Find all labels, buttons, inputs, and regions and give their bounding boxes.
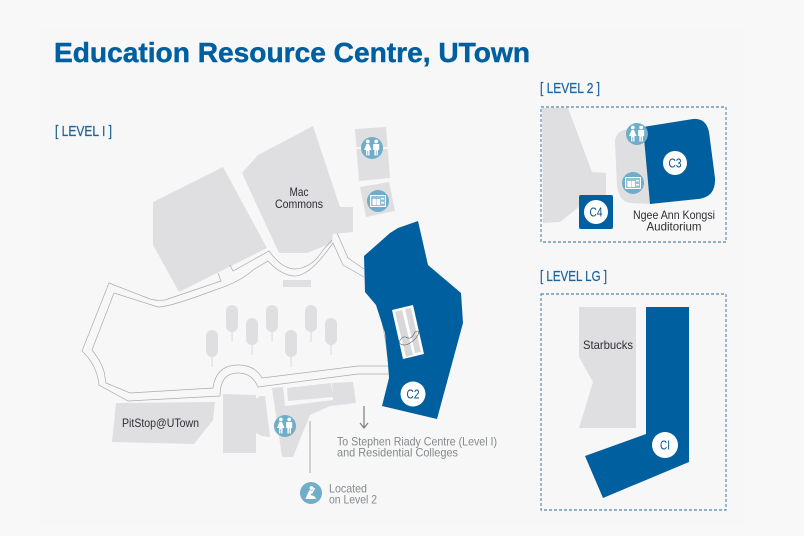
label: on Level 2: on Level 2 [329,492,377,506]
zone: C4 [579,195,613,229]
dashed frame [541,294,726,510]
label: directions line 2: and Residential Colleges [337,446,458,460]
building: AV block [360,182,395,217]
panel: level 2 [541,107,726,242]
dashed frame [541,107,726,242]
heading: level LG: [ LEVEL LG ] [540,269,607,285]
label: Commons: Commons [275,197,323,211]
title: Education Resource Centre, UTown [54,37,530,68]
marker: C3: C3 [668,156,682,170]
icon: restroom south [274,415,296,437]
marker: C4 [584,200,608,224]
label: Ngee Ann Kongsi: Ngee Ann Kongsi [633,208,715,222]
map: level 1 [82,126,497,506]
heading: level 2: [ LEVEL 2 ] [540,81,600,97]
marker: C4: C4 [590,206,603,220]
marker: C1 [652,432,678,458]
escalator block [392,305,424,359]
building: west wing [542,108,606,223]
arrow: to Stephen Riady Centre [360,406,368,428]
panel: level LG [541,294,726,510]
building: west block [153,167,267,292]
marker: C2 [400,382,426,406]
icon: restroom [626,123,648,145]
building: central block [223,394,270,453]
building: foyer [615,127,652,204]
icon: AV room north [367,190,389,212]
zone: C3 [643,119,715,204]
icon: restroom north [355,137,389,159]
marker: C1: CI [660,438,670,452]
building: Starbucks [579,307,636,428]
label: Mac Commons: Mac [290,185,308,199]
label: Auditorium: Auditorium [646,220,702,234]
small plaza block [283,280,311,287]
zone: C2 [364,221,463,419]
icon: AV room [622,172,644,194]
marker: C3 [663,151,687,175]
building: south block [272,382,356,457]
label: directions line 1: To Stephen Riady Centre (Level I) [337,434,497,448]
building: Mac Commons [242,126,353,253]
label: Starbucks: Starbucks [583,338,633,352]
building: restroom block [355,127,390,181]
marker: C2: C2 [406,388,420,402]
building: south inner block [287,383,333,401]
trees [206,305,337,367]
icon: prayer room [300,482,322,504]
building: PitStop@UTown [112,402,215,444]
heading: level 1: [ LEVEL I ] [55,124,112,140]
label: Located: Located [329,482,367,496]
road outline [82,233,389,401]
leader line [310,421,311,473]
zone: C1 [585,307,689,498]
label: PitStop: PitStop@UTown [122,416,199,430]
